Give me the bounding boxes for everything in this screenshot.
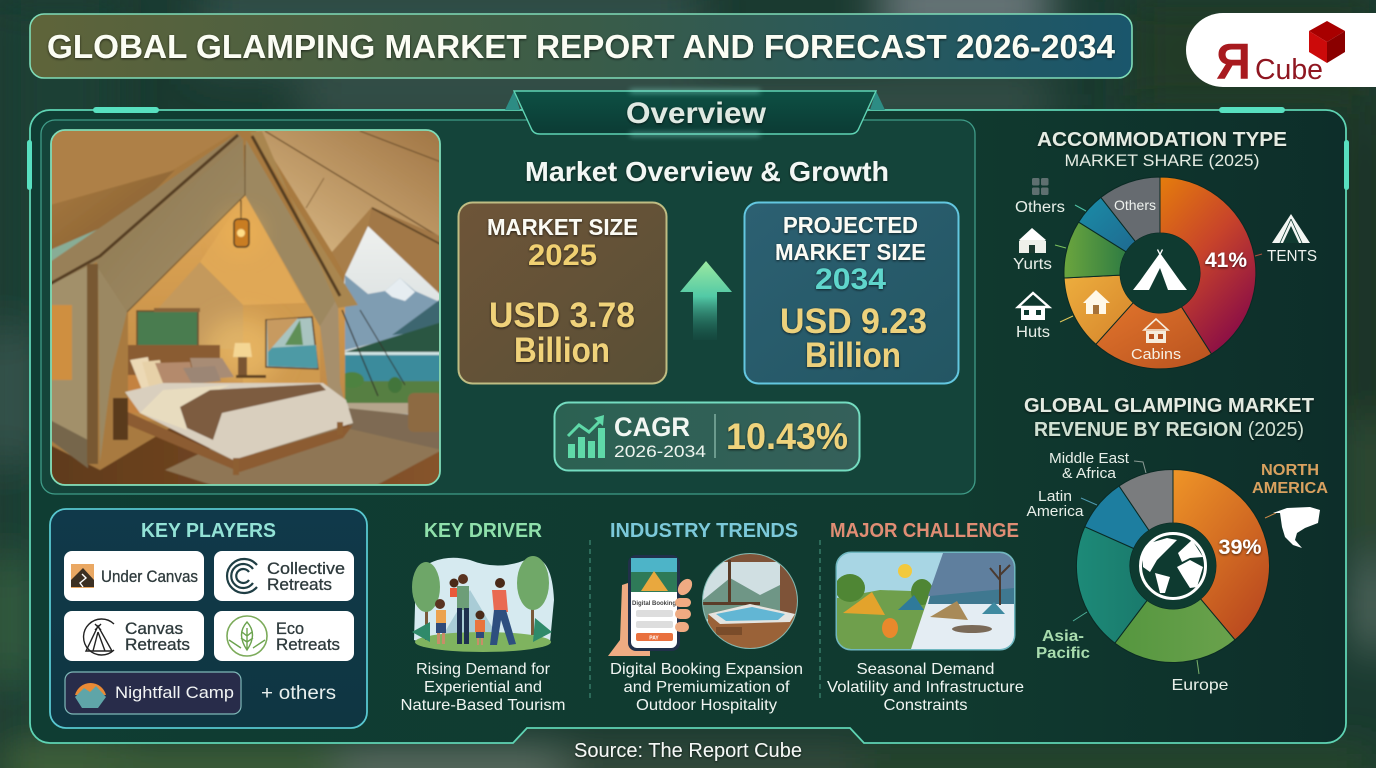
chart labels: revenue by region: Asia- [1042, 628, 1084, 645]
column: industry trends: INDUSTRY TRENDS [610, 520, 798, 542]
heading: accommodation type: ACCOMMODATION TYPE [1037, 129, 1287, 151]
slice: others grey [1101, 177, 1160, 242]
poles and ropes [50, 135, 238, 284]
icon: tent [1272, 214, 1310, 243]
chart labels: revenue by region: Latin [1038, 489, 1072, 505]
card: Eco Retreats: Eco [276, 620, 304, 638]
growth arrow [680, 261, 732, 340]
bed [125, 383, 353, 460]
overview heading tab [505, 90, 885, 136]
card: Nightfall Camp: Nightfall Camp [115, 683, 234, 702]
tent ceiling left [50, 129, 240, 245]
card: Collective Retreats: Retreats [267, 576, 332, 594]
logo: RCube: Я [1216, 33, 1251, 90]
column: industry trends: Digital Booking Expansion [610, 661, 803, 678]
chart labels: accommodation type [1013, 178, 1317, 341]
right tent flaps [382, 211, 439, 239]
wood floor [52, 424, 439, 484]
source note: Source: The Report Cube [574, 740, 802, 762]
slice: huts [1064, 275, 1133, 344]
chart labels: accommodation type: Huts [1016, 324, 1050, 341]
CAGR card: 2026-2034 [614, 442, 706, 461]
slice: yurts [1064, 222, 1126, 278]
card: Canvas Retreats: Canvas [125, 620, 183, 638]
icon: north america silhouette [1273, 507, 1320, 548]
card: Under Canvas [64, 551, 204, 601]
slice: cabins [1096, 303, 1211, 369]
child left [435, 599, 445, 609]
heading: accommodation type: MARKET SHARE (2025) [1064, 152, 1260, 170]
donut chart: accommodation type market share: Cabins [1131, 346, 1181, 363]
column: major challenge: Volatility and Infrastructure [827, 679, 1024, 696]
mother [495, 578, 505, 588]
pillows [129, 356, 150, 389]
card: Canvas Retreats: Retreats [125, 636, 190, 654]
curtains [97, 138, 245, 312]
column: industry trends: Outdoor Hospitality [636, 697, 777, 714]
subheading: market overview and growth: Market Overview & Growth [525, 156, 889, 187]
chart labels: accommodation type: Others [1015, 199, 1065, 216]
card: Collective Retreats: Collective [267, 560, 345, 578]
donut chart: revenue by region [1076, 470, 1269, 663]
donut chart: revenue by region: 39% [1218, 536, 1262, 559]
card: market size 2025: 2025 [528, 239, 597, 272]
chart labels: revenue by region: & Africa [1062, 466, 1117, 482]
card: projected market size 2034: Billion [805, 336, 901, 375]
photo: luxury glamping tent interior [50, 129, 442, 487]
column: major challenge: Seasonal Demand [856, 661, 994, 678]
lantern [240, 200, 242, 220]
right side window [266, 317, 318, 369]
chart labels: revenue by region [1026, 451, 1328, 694]
illustration: hot tub with mountain view [700, 552, 800, 652]
slice: north america 39% [1173, 470, 1269, 640]
card: projected market size 2034: MARKET SIZE [775, 239, 926, 265]
icon: hut [1018, 293, 1049, 320]
icon: central tent [1133, 249, 1187, 290]
lamp [238, 357, 247, 375]
card: market size 2025 [458, 202, 666, 384]
chart labels: revenue by region: NORTH [1261, 462, 1319, 479]
headboard [128, 345, 220, 375]
card: projected market size 2034: USD 9.23 [780, 302, 927, 341]
card: market size 2025: MARKET SIZE [487, 214, 638, 240]
title banner [30, 14, 1132, 78]
icon: others grid [1032, 178, 1048, 195]
heading: revenue by region: GLOBAL GLAMPING MARKET [1024, 394, 1314, 417]
chart labels: revenue by region: AMERICA [1252, 480, 1328, 497]
slice: latin america [1085, 486, 1149, 548]
father with child [458, 574, 468, 584]
overview heading tab: Overview [626, 97, 767, 130]
heading: revenue by region [1024, 394, 1314, 441]
card: projected market size 2034: 2034 [815, 263, 886, 296]
CAGR card [554, 402, 860, 470]
column: major challenge: MAJOR CHALLENGE [830, 520, 1019, 542]
back window [137, 311, 198, 346]
card: market size 2025: Billion [514, 331, 610, 370]
chart labels: accommodation type: Yurts [1013, 256, 1052, 273]
column: key driver: Rising Demand for [416, 661, 551, 678]
left tent wall [52, 266, 88, 440]
icon: growth chart [568, 415, 605, 458]
chart labels: revenue by region: America [1026, 504, 1084, 520]
column: major challenge: Constraints [884, 697, 968, 714]
column: industry trends [608, 520, 803, 714]
card: Canvas Retreats [64, 611, 204, 661]
heading: accommodation type [1037, 129, 1287, 170]
wicker chair [408, 393, 442, 432]
slice: others blue [1079, 197, 1135, 252]
chart labels: accommodation type: TENTS [1267, 248, 1317, 265]
view through right opening [343, 226, 439, 416]
logo: RCube: Cube [1255, 54, 1323, 86]
icon: hut in slice [1083, 290, 1110, 314]
back wall warm chamber [128, 195, 345, 430]
main panel frame [27, 107, 1349, 743]
donut chart: accommodation type market share [1064, 177, 1256, 369]
card: market size 2025: USD 3.78 [489, 296, 635, 335]
panel: key players [50, 509, 367, 728]
chart labels: revenue by region: Europe [1172, 677, 1229, 694]
illustration: family outdoors [412, 556, 554, 652]
illustration: phone booking app in hand: PAY [649, 636, 659, 642]
heading: revenue by region: REVENUE BY REGION (2025) [1034, 418, 1304, 441]
icon: cabin [1144, 319, 1168, 343]
slice: asia pacific [1076, 527, 1147, 643]
title banner: GLOBAL GLAMPING MARKET REPORT AND FORECAST 2026-2034 [47, 29, 1115, 66]
icon: yurt [1019, 228, 1046, 253]
logo: RCube [1186, 13, 1376, 90]
column: major challenge [827, 520, 1024, 714]
slice: tents 41% [1160, 177, 1256, 354]
illustration: summer and winter campsite [835, 553, 1014, 649]
small child [476, 610, 484, 620]
column: key driver: Nature-Based Tourism [400, 697, 566, 714]
card: Nightfall Camp [65, 672, 241, 714]
text: plus others: + others [261, 683, 336, 704]
card: Eco Retreats [214, 611, 354, 661]
panel: key players: KEY PLAYERS [141, 520, 276, 542]
CAGR card: CAGR [614, 412, 690, 442]
slice: europe [1115, 599, 1235, 663]
column: key driver: Experiential and [424, 679, 542, 696]
card: Eco Retreats: Retreats [276, 636, 340, 654]
slice: middle east and africa [1119, 470, 1173, 530]
illustration: phone booking app in hand: Digital Booking [632, 601, 676, 607]
card: Collective Retreats [214, 551, 354, 601]
chart labels: revenue by region: Middle East [1049, 451, 1129, 467]
tent ceiling right [255, 129, 442, 252]
column: key driver [400, 520, 566, 714]
column: industry trends: and Premiumization of [624, 679, 790, 696]
card: projected market size 2034: PROJECTED [783, 212, 918, 238]
card: Under Canvas: Under Canvas [101, 568, 198, 586]
column: key driver: KEY DRIVER [424, 520, 543, 542]
CAGR card: 10.43% [726, 416, 848, 457]
icon: globe [1140, 534, 1206, 598]
donut chart: accommodation type market share: Others [1114, 197, 1156, 213]
chart labels: revenue by region: Pacific [1036, 645, 1090, 662]
illustration: phone booking app in hand [608, 555, 695, 656]
overview inner panel [41, 120, 975, 494]
card: projected market size 2034 [744, 202, 958, 384]
donut chart: accommodation type market share: 41% [1205, 249, 1247, 272]
